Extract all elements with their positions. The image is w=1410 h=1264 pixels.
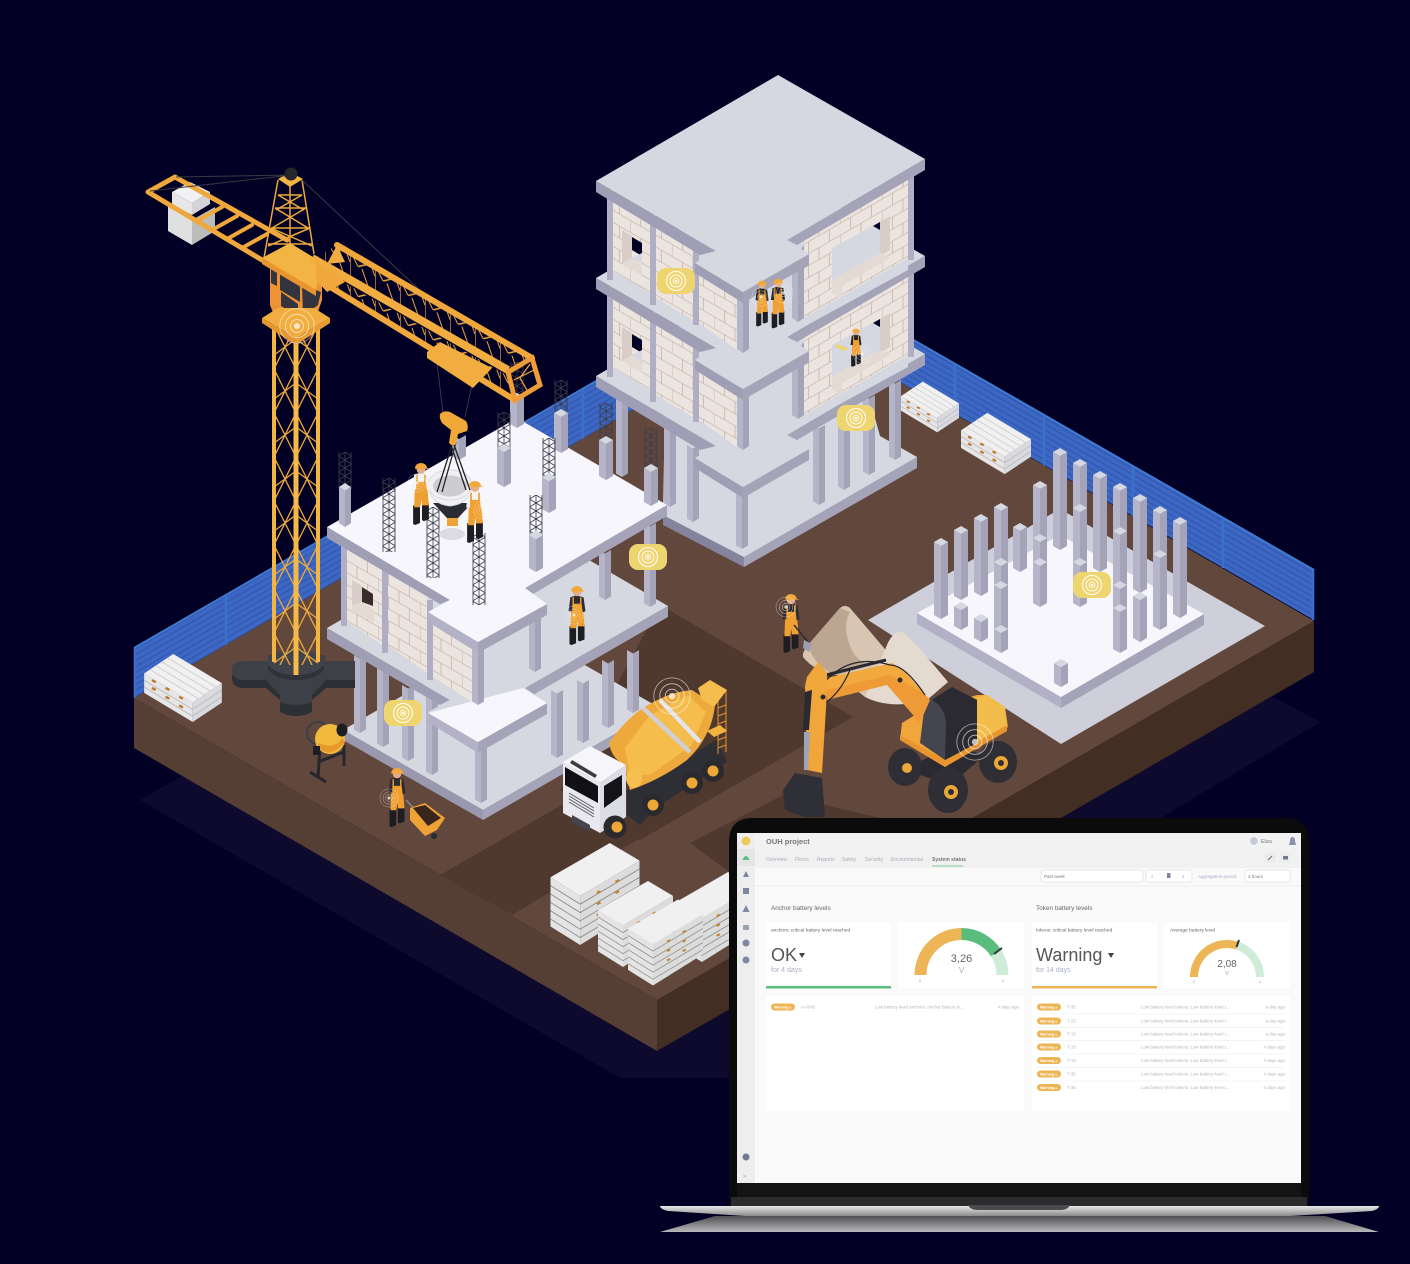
- tab bar: System status: [932, 857, 966, 863]
- middle slab: [327, 518, 668, 753]
- token alerts list: Low battery level tokens: Low battery level t...: [1141, 1032, 1230, 1036]
- worker on balcony rear building: [752, 279, 793, 328]
- counter jib: [148, 177, 287, 260]
- tab bar: Safety: [842, 857, 857, 863]
- blue site fence: [134, 269, 1314, 698]
- truck wheels: [642, 760, 724, 816]
- truck front wheel: [604, 816, 626, 838]
- token gauge card: 4: [1259, 979, 1262, 984]
- anchor gauge card: 4: [1002, 978, 1005, 983]
- tab bar: Overview: [766, 857, 787, 863]
- laptop reflection: [660, 1216, 1379, 1232]
- token alerts list: T-15: [1067, 1058, 1076, 1063]
- token alerts list: a day ago: [1266, 1004, 1286, 1010]
- brick level three: [607, 172, 914, 360]
- sidebar: [737, 833, 755, 1183]
- controls row: ‹: [1151, 874, 1154, 880]
- token alerts list: Low battery level tokens: Low battery level t...: [1141, 1044, 1230, 1050]
- ground columns: [354, 650, 639, 803]
- mixer truck: [563, 678, 727, 838]
- anchor status card: [766, 922, 891, 988]
- token alerts list: Warning ▴: [1040, 1020, 1058, 1024]
- token gauge card: 2,08: [1217, 959, 1237, 970]
- beacon rear building upper: [657, 268, 695, 294]
- tab bar: [755, 849, 1301, 868]
- top bar: [737, 833, 1301, 849]
- token alerts list: Warning ▴: [1040, 1059, 1058, 1063]
- brick level two: [607, 269, 914, 457]
- token alerts list: T-35: [1067, 1004, 1076, 1010]
- sand piles: [803, 606, 948, 704]
- tab bar: Environmental: [891, 857, 923, 863]
- worker on front building floor: [565, 586, 585, 645]
- token alerts list: 4 days ago: [1264, 1072, 1286, 1076]
- anchor gauge card: V: [959, 966, 965, 975]
- laptop base: [660, 1206, 1379, 1216]
- worker with shovel: [776, 594, 812, 653]
- hinge notch: [968, 1205, 1070, 1210]
- cement mixer: [307, 722, 348, 782]
- worker at bucket left: [408, 463, 430, 525]
- excavator bucket: [783, 773, 825, 817]
- base pad: [663, 400, 917, 567]
- token alerts list: T-22: [1067, 1018, 1076, 1024]
- anchor alerts list: Warning ▴: [774, 1006, 792, 1010]
- worker with wheelbarrow: [380, 768, 445, 839]
- beacon front building lower: [384, 700, 422, 726]
- counterweight: [168, 182, 215, 245]
- token gauge card: 0: [1193, 979, 1196, 984]
- beam pallet rear two: [961, 413, 1031, 474]
- token gauge card: Average battery level: [1170, 928, 1215, 934]
- anchor status card: for 4 days: [771, 967, 802, 974]
- truck cab: [563, 746, 626, 833]
- top slab: [327, 418, 667, 653]
- excavator boom: [827, 663, 930, 723]
- crane ripple: [280, 309, 314, 343]
- top bar: Eliza: [1261, 839, 1272, 845]
- token alerts list: Low battery level tokens: Low battery level t...: [1141, 1072, 1230, 1076]
- darker ground paths: [440, 605, 880, 915]
- column stubs and rebar: [338, 362, 658, 605]
- token alerts list: Low battery level tokens: Low battery level t...: [1141, 1018, 1230, 1024]
- token alerts list: Warning ▴: [1040, 1046, 1058, 1050]
- token alerts list: 4 days ago: [1264, 1058, 1286, 1063]
- anchor gauge card: 3,26: [951, 953, 972, 965]
- anchor alerts list: 4 days ago: [998, 1004, 1020, 1010]
- anchor alerts list: [766, 996, 1024, 1111]
- excavator body: [900, 695, 1008, 767]
- front building: [327, 362, 668, 820]
- truck ladder: [718, 690, 726, 754]
- tracks and wheels: [888, 741, 1017, 813]
- token alerts list: 4 days ago: [1264, 1044, 1286, 1050]
- token status card: [1032, 922, 1157, 988]
- token gauge card: V: [1225, 971, 1229, 977]
- beam pallet rear one: [901, 382, 959, 432]
- token alerts list: T-15: [1067, 1032, 1076, 1036]
- trolley: [427, 342, 492, 388]
- worker at window rear building: [835, 329, 871, 367]
- token alerts list: T-35: [1067, 1085, 1076, 1090]
- token gauge card: [1164, 922, 1290, 988]
- controls row: ›: [1182, 874, 1185, 880]
- beacon rear building lower: [837, 405, 875, 431]
- beacon front building upper: [629, 544, 667, 570]
- token alerts list: a day ago: [1266, 1032, 1286, 1036]
- platform: [707, 725, 727, 737]
- token alerts list: Low battery level tokens: Low battery level t...: [1141, 1004, 1230, 1010]
- tower crane: [148, 168, 540, 716]
- anchor alerts list: A-0045: [801, 1004, 816, 1010]
- crane base: [232, 649, 355, 716]
- token status card: Warning: [1036, 945, 1102, 965]
- ground columns: [616, 375, 901, 549]
- main jib: [312, 245, 540, 400]
- rear tall building: [596, 75, 925, 567]
- tab bar: Floors: [795, 857, 809, 863]
- right foundation pad with columns: [868, 448, 1265, 744]
- controls row: 3 hours: [1248, 874, 1264, 879]
- anchor gauge card: [898, 922, 1024, 988]
- token status card: for 14 days: [1036, 967, 1071, 974]
- controls row: Past week: [1044, 874, 1066, 879]
- laptop: [660, 818, 1379, 1232]
- worker at bucket right: [466, 481, 492, 543]
- anchor gauge card: 0: [919, 978, 922, 983]
- crane cabin: [262, 243, 322, 320]
- token heading: Token battery levels: [1036, 905, 1092, 912]
- mixer drum: [609, 690, 715, 790]
- concrete bucket on hook: [428, 411, 472, 540]
- excavator arm: [805, 662, 827, 773]
- excavator: [783, 660, 1017, 817]
- drum chute: [698, 680, 727, 707]
- mast top platform: [262, 308, 330, 345]
- ground platform: [134, 319, 1314, 1051]
- anchor heading: Anchor battery levels: [771, 905, 831, 912]
- token alerts list: Low battery level tokens: Low battery level t...: [1141, 1058, 1230, 1063]
- mixer ripple: [654, 678, 690, 714]
- token alerts list: a day ago: [1266, 1018, 1286, 1024]
- apex tower: [264, 172, 314, 258]
- beacon on foundation: [1073, 572, 1111, 598]
- token alerts list: Warning ▴: [1040, 1086, 1058, 1090]
- excavator ripple: [957, 724, 993, 760]
- crane top cap: [284, 168, 298, 180]
- token alerts list: Warning ▴: [1040, 1032, 1058, 1036]
- mast: [274, 325, 318, 675]
- anchor alerts list: Low battery level anchors: Anchor battery le...: [875, 1004, 964, 1010]
- beam pallet left: [144, 654, 222, 722]
- excavator cab: [920, 687, 977, 760]
- laptop lid: [729, 818, 1309, 1206]
- token alerts list: Low battery level tokens: Low battery level t...: [1141, 1085, 1230, 1090]
- controls row: [755, 870, 1301, 886]
- dashboard screen: [737, 833, 1301, 1183]
- tab bar: Security: [865, 857, 884, 863]
- sidebar: »: [743, 1174, 747, 1180]
- excavator hoses: [806, 662, 925, 712]
- controls row: Aggregation period:: [1198, 874, 1237, 879]
- token alerts list: 5 days ago: [1264, 1085, 1286, 1090]
- crane cables: [150, 175, 473, 417]
- precast slab stacks: [550, 843, 754, 985]
- truck chassis: [627, 740, 727, 825]
- token alerts list: T-35: [1067, 1072, 1076, 1076]
- top bar: OUH project: [766, 837, 810, 846]
- roof slab: [596, 75, 925, 303]
- token status card: tokens: critical battery level reached: [1036, 928, 1113, 934]
- anchor status card: OK: [771, 945, 797, 965]
- token alerts list: T-15: [1067, 1044, 1076, 1050]
- brick walls: [341, 523, 656, 705]
- platform shadow: [140, 697, 1320, 1078]
- token alerts list: [1032, 996, 1290, 1111]
- token alerts list: Warning ▴: [1040, 1072, 1058, 1076]
- base pad: [343, 628, 660, 820]
- token alerts list: Warning ▴: [1040, 1006, 1058, 1010]
- anchor status card: anchors: critical battery level reached: [771, 928, 851, 934]
- tab bar: Reports: [817, 857, 835, 863]
